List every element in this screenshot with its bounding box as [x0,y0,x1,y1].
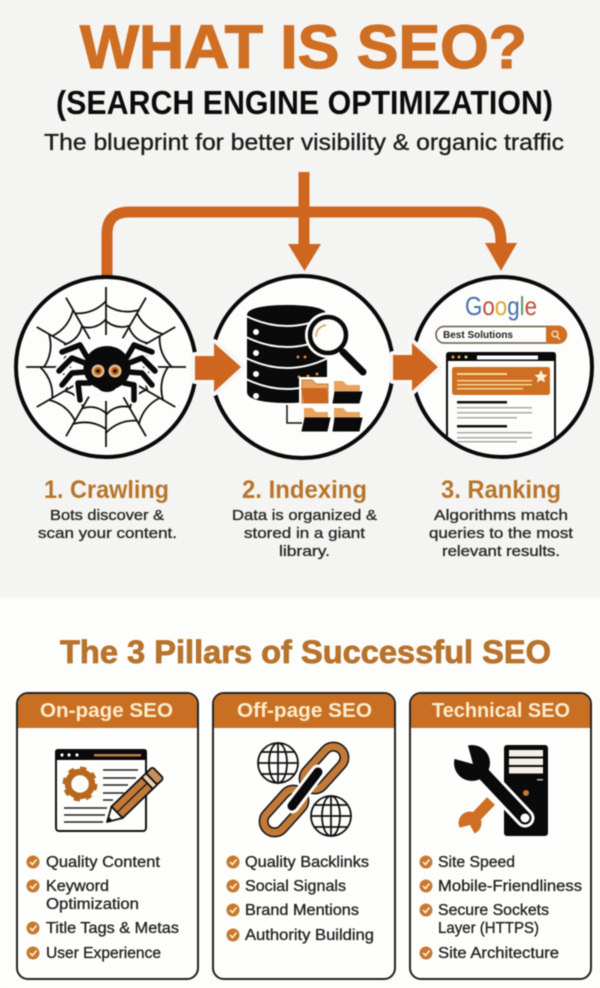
arrow: crawling to indexing [195,343,241,392]
icon: linked globes [258,742,351,837]
technical checklist: Site Architecture [438,945,559,962]
step 1 crawling text: scan your content. [38,525,177,542]
google logo: Google [465,291,537,321]
arrow: indexing to ranking [393,343,438,391]
technical checklist [420,854,582,962]
panel: indexing circle [211,276,393,458]
on-page checklist: Keyword [46,878,109,895]
panel: ranking circle [412,277,592,463]
panel: on-page SEO [17,693,198,979]
step 3 ranking text: Algorithms match [434,507,568,524]
on-page header [18,694,197,728]
step 3 ranking text: relevant results. [442,543,560,560]
pillars heading: The 3 Pillars of Successful SEO [60,634,551,670]
on-page checklist: Title Tags & Metas [46,920,179,937]
technical header: Technical SEO [432,700,570,722]
technical checklist: Site Speed [438,854,515,871]
connector line [287,405,302,423]
on-page header: On-page SEO [40,700,173,722]
panel: technical SEO [410,693,591,979]
technical header [411,694,590,728]
step 3 ranking text: 3. Ranking [441,476,561,504]
technical checklist: Layer (HTTPS) [438,920,539,937]
step 3 ranking text [429,476,574,560]
step 1 crawling text [38,476,177,542]
step 2 indexing text: Data is organized & [232,507,377,524]
tagline: The blueprint for better visibility & organic traffic [44,129,564,155]
panel: off-page SEO [213,693,395,979]
title: WHAT IS SEO? [80,13,527,81]
step 2 indexing text: library. [279,543,330,560]
magnifying glass [305,312,363,372]
folders [299,377,362,431]
subtitle: (SEARCH ENGINE OPTIMIZATION) [56,84,553,121]
on-page checklist [26,854,179,962]
step 2 indexing text [232,476,377,560]
search bar [436,326,567,344]
off-page header: Off-page SEO [237,700,372,722]
icon: document with gear and pencil [55,749,164,831]
off-page checklist [226,854,374,944]
results browser window [446,352,556,463]
panel: crawling circle [16,277,196,457]
off-page checklist: Authority Building [245,927,374,944]
off-page checklist: Quality Backlinks [245,854,369,871]
off-page header [214,694,394,728]
icon: server and wrench [448,742,548,840]
branching arrow connector [107,172,517,277]
step 1 crawling text: 1. Crawling [44,476,169,504]
spider [59,335,155,401]
step 2 indexing text: 2. Indexing [242,476,367,504]
step 1 crawling text: Bots discover & [50,507,164,524]
database [246,305,328,403]
off-page checklist: Brand Mentions [245,902,359,919]
spider web [20,281,192,453]
technical checklist: Mobile-Friendliness [438,878,582,895]
off-page checklist: Social Signals [245,878,346,895]
on-page checklist: Optimization [46,896,139,913]
step 3 ranking text: queries to the most [429,525,574,542]
technical checklist: Secure Sockets [438,902,549,919]
on-page checklist: User Experience [46,945,161,962]
on-page checklist: Quality Content [46,854,161,871]
search bar: Best Solutions [443,330,513,341]
step 2 indexing text: stored in a giant [244,525,366,542]
